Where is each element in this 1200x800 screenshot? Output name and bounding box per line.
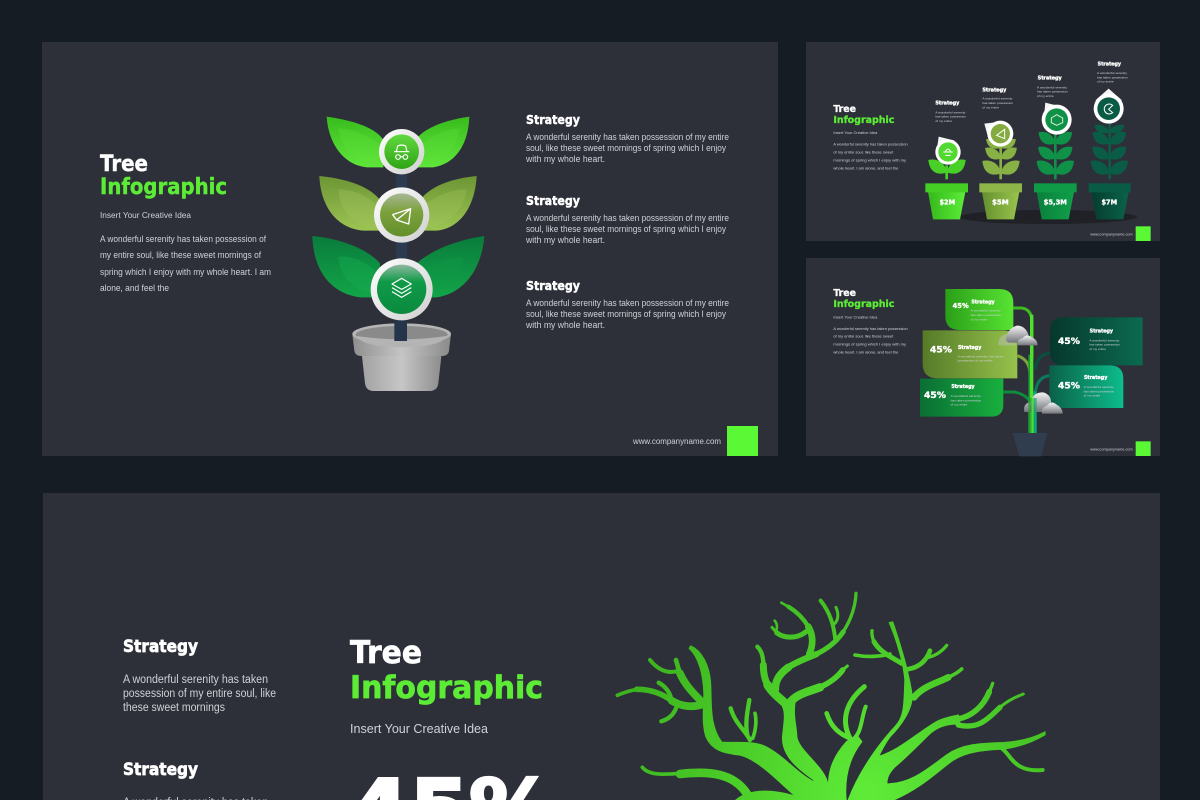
strategy label 2: A wonderful serenity (982, 97, 1013, 101)
title: Infographic (100, 175, 227, 200)
far left cluster (617, 660, 704, 721)
icon badge: layers (371, 258, 433, 320)
stem highlight over cloud (1028, 398, 1037, 433)
subtitle: Insert Your Creative Idea (100, 210, 191, 220)
subtitle: Insert Your Creative Idea (833, 315, 878, 319)
strategy block 1: Strategy (123, 637, 198, 657)
pin 2 (984, 121, 1013, 147)
panel background (42, 42, 778, 456)
pot 3 $5,3M: $5,3M (1044, 198, 1067, 206)
cloud lower (1024, 392, 1063, 414)
strategy label 1: of my entire (935, 119, 952, 123)
strategy label 2 (982, 87, 1013, 109)
intro text block: my entire soul, like these sweet mornings of (100, 250, 261, 260)
intro text (833, 327, 908, 355)
card D: has taken possession (1089, 343, 1120, 347)
footer url: www.companyname.com (632, 437, 721, 446)
card A (945, 289, 1013, 330)
intro text: of my entire soul, like these sweet (833, 151, 893, 155)
card E (1049, 365, 1123, 408)
pot 3 $5,3M (1034, 183, 1077, 219)
strategy label 4: A wonderful serenity (1097, 71, 1128, 75)
stem in pot (394, 318, 407, 341)
pin 3 (1042, 103, 1072, 135)
strategy label 1: A wonderful serenity (935, 110, 966, 114)
pot 1 $2M: $2M (939, 198, 955, 206)
pot 2 $5M: $5M (992, 198, 1009, 206)
strategy 1: Strategy (526, 112, 580, 127)
title: Tree (833, 288, 856, 299)
right main limb (848, 622, 1045, 800)
strategy 3: soul, like these sweet mornings of spring which I enjoy (526, 309, 726, 319)
intro text: mornings of spring which I enjoy with my (833, 343, 906, 347)
intro text: whole heart. I am alone, and feel the (833, 351, 898, 355)
strategy block 1 (123, 637, 276, 714)
intro text: mornings of spring which I enjoy with my (833, 159, 906, 163)
intro text (833, 143, 908, 170)
pin 4 (1094, 89, 1124, 124)
stem (1028, 315, 1037, 433)
strategy label 4 (1097, 62, 1128, 84)
center trunk (757, 593, 856, 800)
card B (923, 330, 1017, 378)
card A: of my entire (971, 317, 988, 321)
strategy block 2: Strategy (123, 760, 198, 780)
panel background (806, 258, 1160, 456)
top leaves (327, 117, 469, 167)
title: Tree (350, 635, 422, 671)
panel background (43, 493, 1160, 800)
intro text block: spring which I enjoy with my whole heart. I am (100, 267, 271, 277)
icon badge: paper plane (374, 187, 429, 243)
strategy label 3: has taken possession (1037, 90, 1068, 94)
card A: A wonderful serenity (971, 309, 1001, 313)
strategy block 2 (123, 760, 268, 800)
card D: Strategy (1090, 328, 1114, 334)
card D: 45% (1058, 337, 1080, 347)
title: Tree (833, 104, 856, 115)
leaf plant diagram (312, 117, 484, 391)
strategy 2: Strategy (526, 193, 580, 208)
strategy 1: with my whole heart. (525, 154, 605, 164)
pot (1013, 433, 1047, 456)
plant 4 (1091, 122, 1128, 179)
panel: large tree slide (43, 493, 1160, 800)
pot shadow (958, 210, 1137, 224)
card C: has taken possession (951, 398, 982, 402)
intro text: whole heart. I am alone, and feel the (833, 166, 898, 170)
strategy 2 (525, 193, 729, 245)
pot 2 $5M (979, 183, 1022, 219)
card D: A wonderful serenity (1089, 338, 1120, 342)
panel: potted leaf infographic slide (42, 42, 778, 456)
cloud upper (999, 326, 1038, 345)
footer green square (1136, 441, 1151, 456)
title (833, 288, 894, 310)
card A: has taken possession (971, 313, 1002, 317)
strategy 3: Strategy (526, 278, 580, 293)
card B: A wonderful serenity has taken (958, 354, 1004, 358)
icon badge: hat and glasses (379, 129, 424, 174)
strategy label 3: Strategy (1038, 76, 1062, 82)
card A: 45% (953, 302, 969, 310)
plant 1 (928, 160, 966, 179)
pot (352, 323, 451, 391)
plant 3 (1037, 129, 1074, 179)
left twigs (731, 700, 756, 740)
strategy 3 (525, 278, 729, 330)
title (350, 635, 543, 706)
subtitle: Insert Your Creative Idea (833, 131, 878, 135)
panel: plant pots slide (806, 42, 1160, 241)
footer url: www.companyname.com (1090, 232, 1133, 236)
card D: of my entire (1089, 347, 1106, 351)
strategy block 1: possession of my entire soul, like (123, 688, 276, 700)
panel: branch cards slide (806, 258, 1160, 456)
branches (1003, 308, 1050, 406)
intro text block (100, 234, 271, 293)
intro text: of my entire soul, like these sweet (833, 335, 893, 339)
pot 1 $2M (925, 183, 968, 219)
footer green square (727, 426, 758, 456)
strategy label 3 (1037, 76, 1068, 98)
strategy label 3: of my entire (1037, 94, 1054, 98)
plant 2 (982, 139, 1020, 179)
strategy 2: soul, like these sweet mornings of spring which I enjoy (526, 224, 726, 234)
strategy 1 (525, 112, 729, 164)
title: Infographic (833, 299, 894, 310)
main left limb (689, 646, 833, 800)
strategy 2: with my whole heart. (525, 235, 605, 245)
lower left limb (642, 767, 807, 800)
strategy 3: A wonderful serenity has taken possession of my entire (526, 298, 729, 308)
card A: Strategy (971, 299, 995, 305)
strategy label 2: Strategy (982, 87, 1007, 93)
card E: has taken possession (1084, 389, 1115, 393)
strategy 1: A wonderful serenity has taken possession of my entire (526, 132, 729, 142)
strategy 3: with my whole heart. (525, 320, 605, 330)
strategy 1: soul, like these sweet mornings of spring which I enjoy (526, 143, 726, 153)
footer url: www.companyname.com (1090, 447, 1133, 451)
strategy label 1 (935, 101, 966, 123)
title: Infographic (350, 670, 543, 706)
title: Infographic (833, 115, 894, 126)
strategy label 1: has taken possession (935, 114, 966, 118)
strategy label 2: of my entire (982, 105, 999, 109)
card C: Strategy (951, 384, 975, 390)
card C: A wonderful serenity (951, 394, 981, 398)
intro text block: alone, and feel the (100, 283, 169, 293)
strategy block 1: A wonderful serenity has taken (123, 674, 268, 686)
card E: Strategy (1084, 375, 1108, 381)
strategy label 4: has taken possession (1097, 75, 1128, 79)
card E: A wonderful serenity (1084, 385, 1114, 389)
card B: possession of my entire (958, 359, 993, 363)
strategy label 3: A wonderful serenity (1037, 85, 1068, 89)
bottom leaves (312, 236, 484, 297)
card E: 45% (1058, 382, 1080, 392)
pot 4 $7M (1089, 183, 1131, 219)
card E: of my entire (1084, 394, 1101, 398)
footer green square (1136, 226, 1151, 241)
subtitle: Insert Your Creative Idea (350, 721, 489, 736)
intro text: A wonderful serenity has taken possession (833, 143, 908, 147)
title (100, 152, 227, 200)
strategy 2: A wonderful serenity has taken possession of my entire (526, 213, 729, 223)
card C: of my entire (951, 403, 968, 407)
strategy block 1: these sweet mornings (123, 702, 225, 714)
card D (1050, 317, 1143, 365)
pot 4 $7M: $7M (1101, 198, 1117, 206)
strategy label 4: Strategy (1098, 62, 1122, 68)
intro text block: A wonderful serenity has taken possession of (100, 234, 266, 244)
green tree illustration (617, 593, 1045, 800)
card C: 45% (924, 391, 946, 401)
card B: Strategy (958, 345, 982, 351)
title (833, 104, 894, 126)
strategy label 2: has taken possession (982, 101, 1013, 105)
small center fork (827, 687, 866, 800)
strategy label 1: Strategy (935, 101, 960, 107)
card B: 45% (930, 346, 952, 356)
intro text: A wonderful serenity has taken possession (833, 327, 908, 331)
pin 1 (935, 137, 961, 165)
strategy label 4: of my entire (1097, 80, 1114, 84)
title: Tree (100, 152, 148, 177)
panel background (806, 42, 1160, 241)
stem (396, 167, 407, 340)
middle leaves (319, 176, 477, 231)
card C (920, 379, 1003, 417)
